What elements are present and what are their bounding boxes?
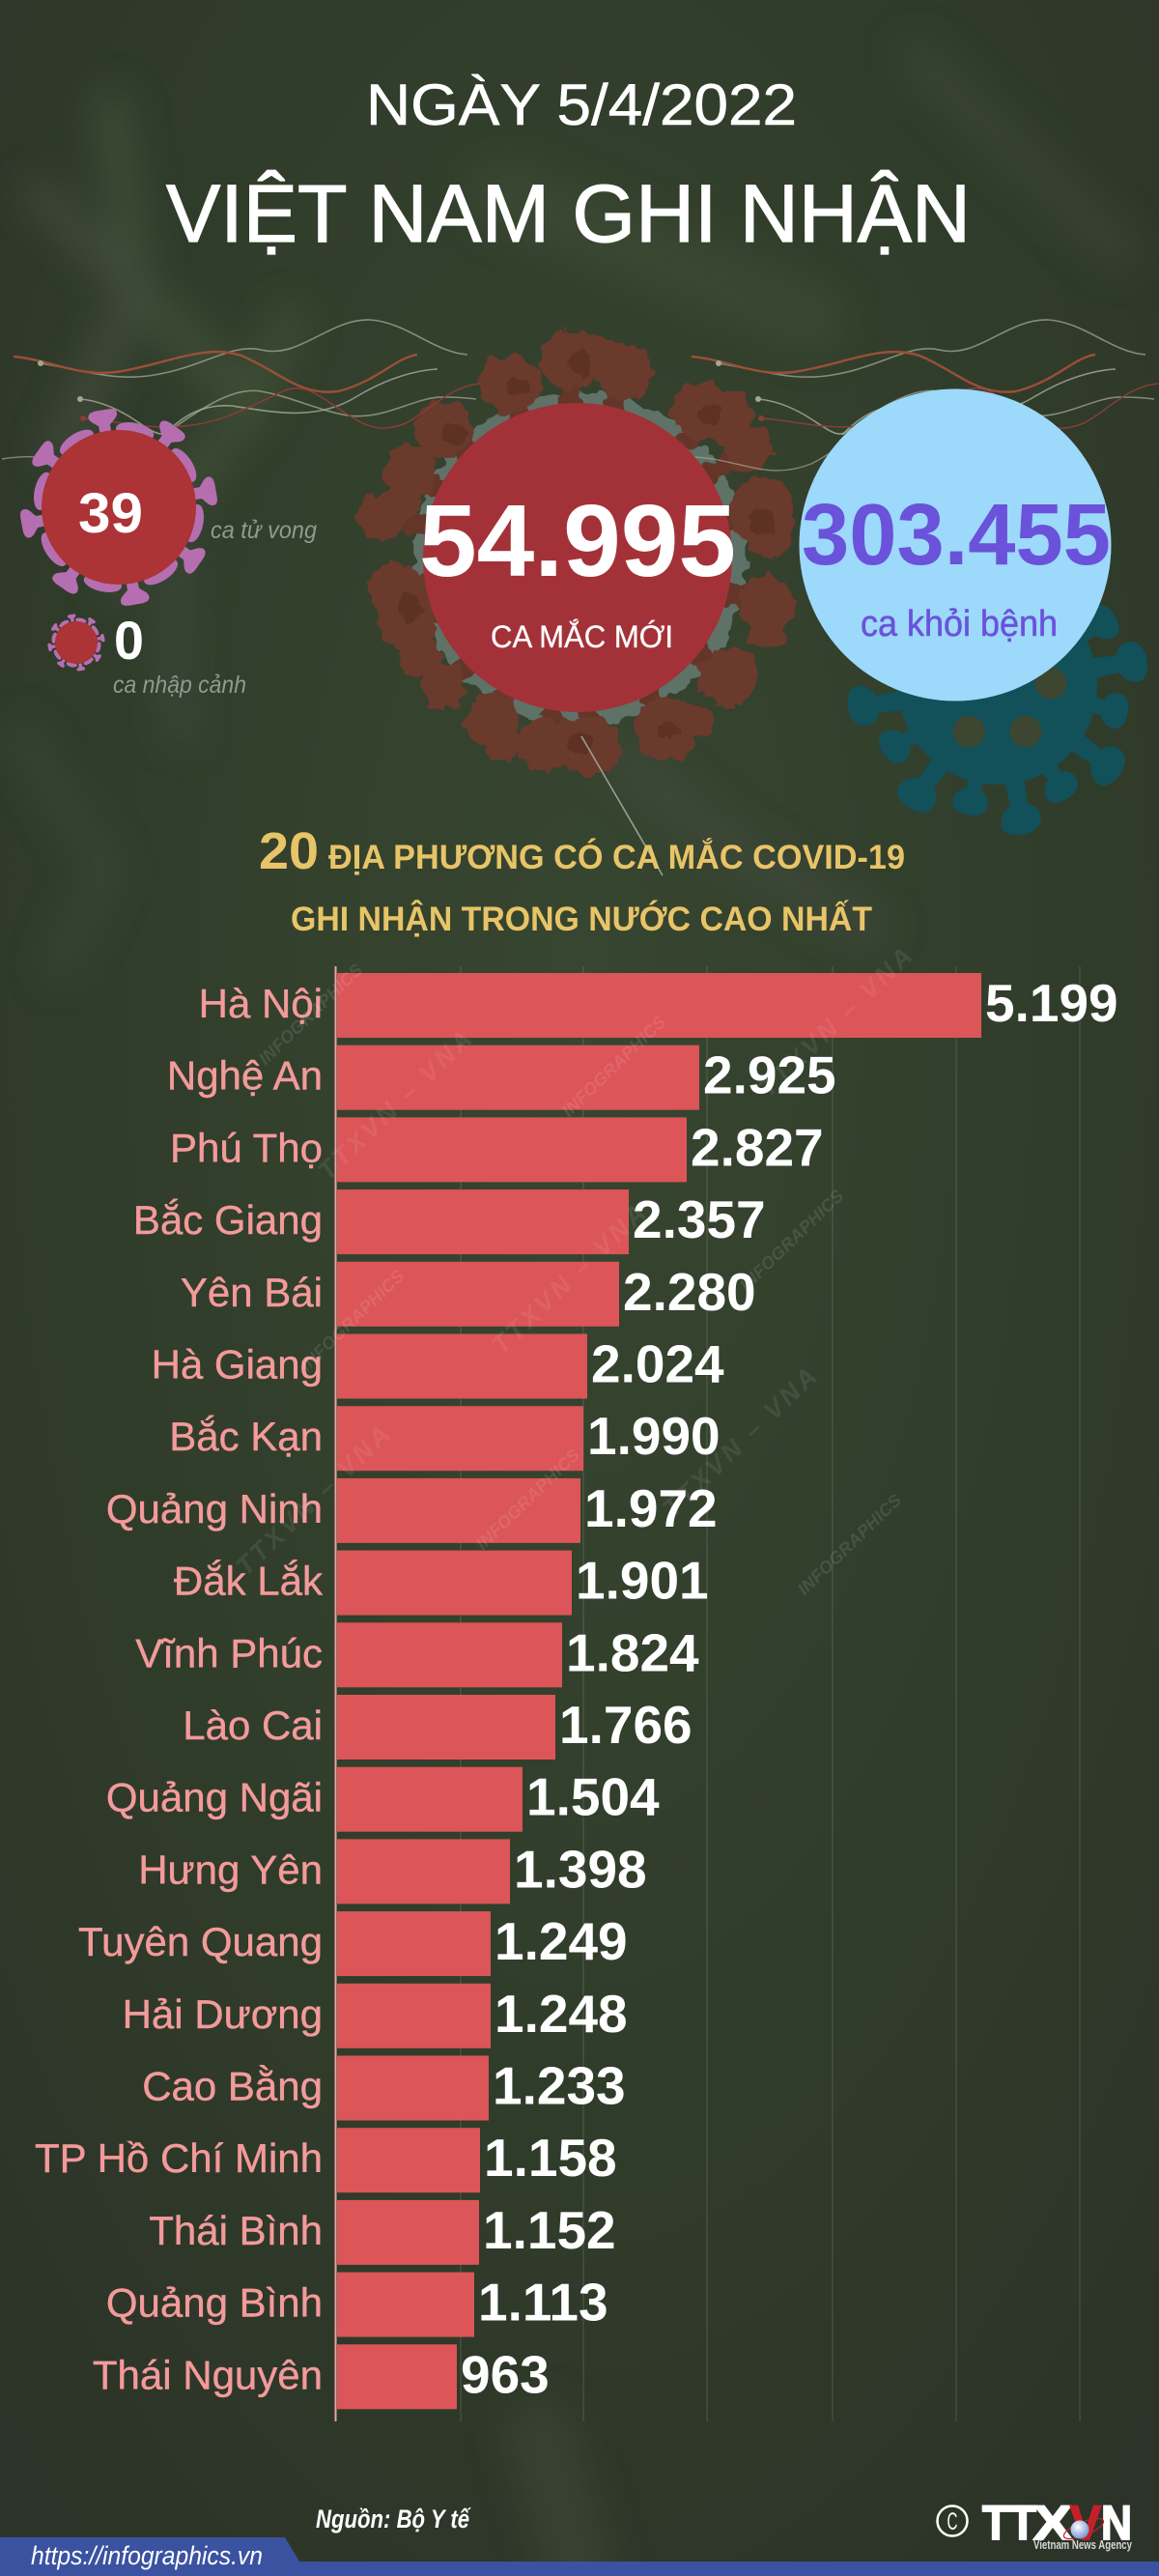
heading: chart title: 20 — [259, 822, 319, 880]
row: Hà Nội — [199, 973, 1118, 1038]
row: Tuyên Quang: 1.249 — [495, 1911, 628, 1971]
row: Cao Bằng — [142, 2056, 626, 2120]
row: Vĩnh Phúc: 1.824 — [566, 1622, 699, 1682]
row: Hà Nội: Hà Nội — [199, 981, 323, 1026]
source note: Nguồn: Bộ Y tế — [316, 2504, 471, 2533]
recovered number: 303.455 — [802, 487, 1111, 584]
row: Đắk Lắk: Đắk Lắk — [174, 1559, 324, 1604]
row: Vĩnh Phúc: Vĩnh Phúc — [135, 1630, 323, 1675]
logo: TTXVN — [937, 2496, 1133, 2552]
panel: imported cases — [47, 610, 246, 699]
row: Quảng Ninh — [106, 1478, 718, 1543]
row: TP Hồ Chí Minh: 1.158 — [484, 2128, 617, 2188]
icon: small virus — [47, 614, 105, 672]
red circle — [42, 430, 196, 585]
row: Bắc Kạn: Bắc Kạn — [169, 1414, 323, 1459]
logo: TTXVN: C — [947, 2508, 958, 2535]
watermarks: TTXVN – VNA — [752, 942, 919, 1102]
panel: deaths — [19, 408, 317, 607]
watermarks: INFOGRAPHICS — [736, 1187, 847, 1295]
panel: recovered — [800, 388, 1111, 701]
icon: teal virus — [845, 586, 1150, 838]
watermarks: INFOGRAPHICS — [558, 1013, 669, 1121]
footer bar — [0, 2537, 1159, 2576]
row: Quảng Bình: Quảng Bình — [106, 2280, 323, 2326]
row: Bắc Giang — [133, 1189, 766, 1254]
red circle — [423, 403, 732, 712]
heading: chart title: GHI NHẬN TRONG NƯỚC CAO NHẤT — [291, 900, 872, 938]
row: Hải Dương: 1.248 — [495, 1984, 628, 2044]
pointer line — [581, 736, 663, 875]
row: Yên Bái: Yên Bái — [181, 1270, 323, 1315]
recovered label: ca khỏi bệnh — [861, 604, 1058, 644]
decorative waves — [2, 320, 1158, 471]
logo: TTXVN: T — [982, 2496, 1009, 2550]
watermarks: TTXVN – VNA — [486, 1199, 652, 1360]
row: Hưng Yên — [138, 1839, 647, 1903]
logo: TTXVN: N — [1101, 2496, 1132, 2550]
row: Hà Giang: Hà Giang — [152, 1341, 323, 1388]
watermarks: TTXVN – VNA — [657, 1362, 823, 1523]
row: Lào Cai: 1.766 — [559, 1695, 693, 1755]
row: TP Hồ Chí Minh: TP Hồ Chí Minh — [35, 2135, 323, 2181]
row: Hà Giang — [152, 1333, 724, 1399]
row: Cao Bằng: Cao Bằng — [142, 2064, 323, 2108]
row: Hà Giang: 2.024 — [591, 1333, 724, 1393]
row: Thái Bình: 1.152 — [483, 2200, 616, 2260]
row: Yên Bái: 2.280 — [623, 1262, 756, 1322]
row: Nghệ An — [167, 1045, 836, 1110]
logo: TTXVN: X — [1033, 2496, 1072, 2550]
row: Nghệ An: Nghệ An — [167, 1053, 323, 1099]
title: date: NGÀY 5/4/2022 — [366, 72, 797, 137]
row: Hưng Yên: 1.398 — [514, 1839, 647, 1899]
row: Quảng Ngãi: 1.504 — [526, 1767, 660, 1827]
row: Quảng Ninh: 1.972 — [584, 1478, 718, 1538]
imported label: ca nhập cảnh — [113, 672, 246, 699]
heading: chart title — [259, 822, 905, 938]
row: Yên Bái — [181, 1262, 756, 1327]
bar chart — [35, 966, 1118, 2421]
row: TP Hồ Chí Minh — [35, 2128, 617, 2192]
row: Hà Nội: 5.199 — [985, 973, 1118, 1033]
deaths label: ca tử vong — [211, 517, 317, 544]
row: Bắc Kạn: 1.990 — [587, 1406, 721, 1466]
watermarks: TTXVN – VNA — [312, 1025, 478, 1186]
row: Phú Thọ: 2.827 — [691, 1117, 824, 1177]
row: Thái Bình — [149, 2200, 616, 2265]
row: Nghệ An: 2.925 — [703, 1045, 836, 1105]
heading: chart title: ĐỊA PHƯƠNG CÓ CA MẮC COVID-19 — [328, 838, 905, 876]
row: Đắk Lắk: 1.901 — [576, 1551, 709, 1611]
watermarks: INFOGRAPHICS — [297, 1267, 408, 1375]
row: Hưng Yên: Hưng Yên — [138, 1846, 323, 1892]
deaths number: 39 — [78, 482, 143, 545]
row: Thái Bình: Thái Bình — [149, 2208, 323, 2253]
logo: TTXVN: T — [1009, 2496, 1036, 2550]
row: Thái Nguyên — [93, 2344, 550, 2409]
row: Bắc Giang: 2.357 — [633, 1189, 766, 1249]
logo: TTXVN: V — [1070, 2496, 1102, 2550]
watermarks: INFOGRAPHICS — [794, 1491, 905, 1599]
row: Đắk Lắk — [174, 1551, 709, 1616]
row: Quảng Bình: 1.113 — [478, 2273, 608, 2333]
imported number: 0 — [114, 610, 144, 671]
row: Phú Thọ — [170, 1117, 824, 1182]
row: Phú Thọ: Phú Thọ — [170, 1125, 323, 1170]
watermarks: TTXVN – VNA — [230, 1420, 396, 1581]
row: Bắc Kạn — [169, 1406, 721, 1471]
new cases label: CA MẮC MỚI — [491, 619, 673, 654]
row: Hải Dương: Hải Dương — [123, 1991, 323, 2037]
watermarks: INFOGRAPHICS — [255, 960, 366, 1069]
row: Thái Nguyên: Thái Nguyên — [93, 2352, 323, 2397]
icon: brown coronavirus — [357, 330, 797, 775]
blue circle — [800, 388, 1111, 701]
panel: new cases — [419, 403, 736, 712]
website url: https://infographics.vn — [31, 2541, 263, 2570]
title: Việt Nam ghi nhận: VIỆT NAM GHI NHẬN — [166, 168, 971, 259]
row: Cao Bằng: 1.233 — [493, 2056, 626, 2116]
row: Quảng Bình — [106, 2273, 608, 2337]
watermarks: INFOGRAPHICS — [472, 1445, 583, 1554]
row: Tuyên Quang — [78, 1911, 628, 1976]
row: Quảng Ngãi — [106, 1767, 660, 1832]
new cases number: 54.995 — [419, 484, 736, 598]
row: Lào Cai — [183, 1695, 693, 1760]
row: Quảng Ngãi: Quảng Ngãi — [106, 1775, 323, 1820]
row: Vĩnh Phúc — [135, 1622, 699, 1687]
icon: virus spikes — [19, 408, 218, 607]
row: Thái Nguyên: 963 — [461, 2344, 550, 2404]
row: Lào Cai: Lào Cai — [183, 1703, 323, 1748]
row: Hải Dương — [123, 1984, 628, 2048]
row: Quảng Ninh: Quảng Ninh — [106, 1486, 323, 1531]
watermarks — [230, 942, 919, 1599]
row: Bắc Giang: Bắc Giang — [133, 1197, 323, 1243]
row: Tuyên Quang: Tuyên Quang — [78, 1919, 323, 1964]
